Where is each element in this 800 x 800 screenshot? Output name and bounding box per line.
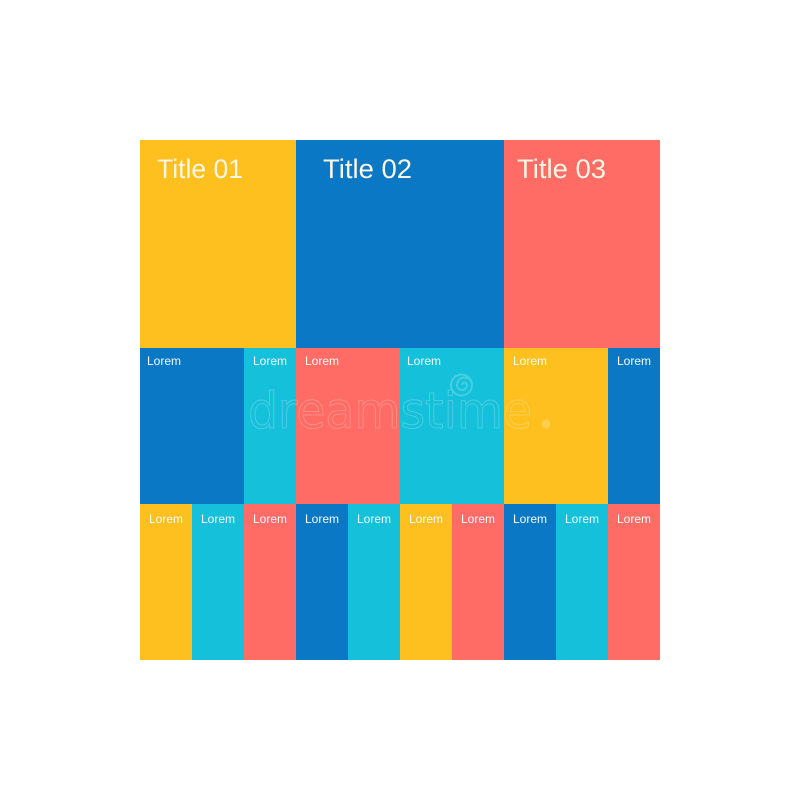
panel: title 01 bbox=[140, 140, 296, 348]
block: bottom 8: Lorem bbox=[513, 512, 547, 526]
block: bottom 4: Lorem bbox=[305, 512, 339, 526]
block: bottom 9 bbox=[556, 504, 608, 660]
block: bottom 4 bbox=[296, 504, 348, 660]
row: bottom level blocks bbox=[140, 504, 660, 660]
block: bottom 6: Lorem bbox=[409, 512, 443, 526]
panel: title 03: Title 03 bbox=[517, 154, 606, 184]
block: middle 4 bbox=[400, 348, 504, 504]
row: middle level blocks bbox=[140, 348, 660, 504]
block: middle 3 bbox=[296, 348, 400, 504]
block: middle 6: Lorem bbox=[617, 354, 651, 368]
block: middle 5 bbox=[504, 348, 608, 504]
block: bottom 10: Lorem bbox=[617, 512, 651, 526]
block: bottom 1: Lorem bbox=[149, 512, 183, 526]
block: middle 1: Lorem bbox=[147, 354, 181, 368]
block: middle 3: Lorem bbox=[305, 354, 339, 368]
block: bottom 7: Lorem bbox=[461, 512, 495, 526]
block: bottom 5 bbox=[348, 504, 400, 660]
watermark: dreamstime bbox=[248, 382, 532, 440]
block: bottom 9: Lorem bbox=[565, 512, 599, 526]
block: middle 2 bbox=[244, 348, 296, 504]
block: middle 5: Lorem bbox=[513, 354, 547, 368]
block: middle 4: Lorem bbox=[407, 354, 441, 368]
block: bottom 2: Lorem bbox=[201, 512, 235, 526]
panel: title 02 bbox=[296, 140, 504, 348]
block: bottom 5: Lorem bbox=[357, 512, 391, 526]
block: bottom 7 bbox=[452, 504, 504, 660]
block: bottom 3: Lorem bbox=[253, 512, 287, 526]
panel: title 02: Title 02 bbox=[323, 154, 412, 184]
panel: title 03 bbox=[504, 140, 660, 348]
block: bottom 10 bbox=[608, 504, 660, 660]
block: middle 6 bbox=[608, 348, 660, 504]
panel: title 01: Title 01 bbox=[157, 154, 243, 184]
block: middle 1 bbox=[140, 348, 244, 504]
block: bottom 2 bbox=[192, 504, 244, 660]
block: bottom 3 bbox=[244, 504, 296, 660]
block: bottom 1 bbox=[140, 504, 192, 660]
block: middle 2: Lorem bbox=[253, 354, 287, 368]
block: bottom 8 bbox=[504, 504, 556, 660]
block: bottom 6 bbox=[400, 504, 452, 660]
